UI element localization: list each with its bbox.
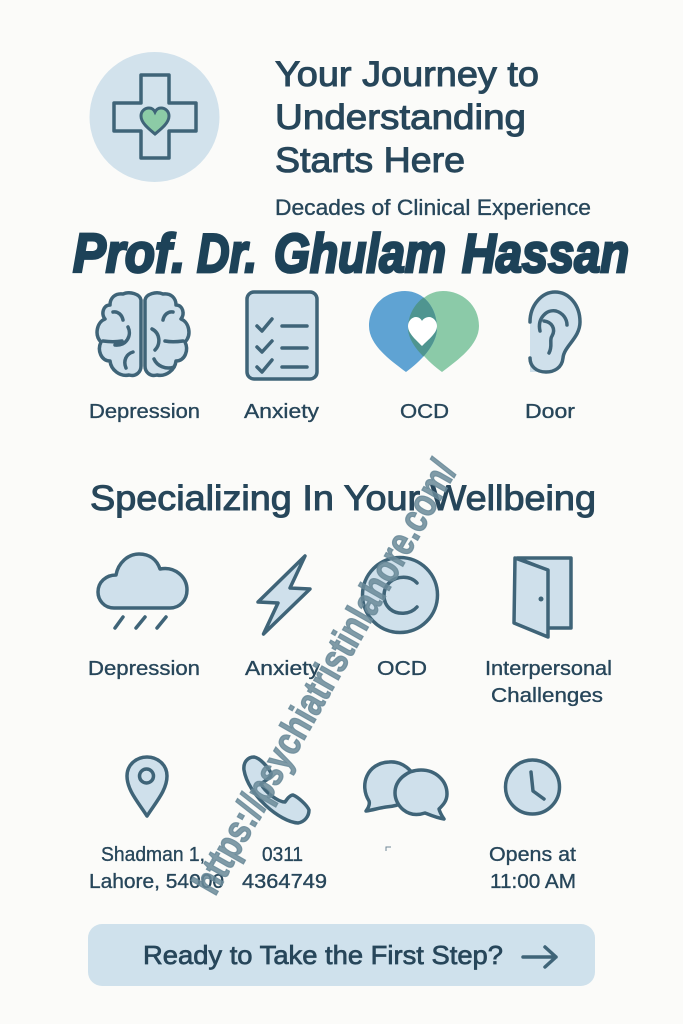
labels: contact row: 0311: [262, 844, 303, 866]
watermark url: https://psychiatristinlahore.com/: [185, 453, 465, 901]
title: [275, 55, 539, 180]
labels: first row: [89, 401, 575, 423]
labels: contact row: [89, 844, 576, 893]
doctor name: Ghulam: [274, 222, 446, 284]
labels: first row: OCD: [400, 401, 449, 423]
labels: contact row: 11:00 AM: [490, 871, 576, 893]
icon: medical cross with heart: [90, 52, 220, 182]
icon: lightning bolt: [258, 556, 310, 634]
labels: contact row: Lahore, 54000: [89, 871, 224, 893]
labels: second row: OCD: [377, 658, 427, 680]
labels: first row: Anxiety: [244, 401, 319, 423]
icon row: conditions: [97, 291, 580, 379]
labels: second row: Depression: [88, 658, 200, 680]
doctor name: Dr.: [197, 222, 257, 284]
icon: location pin: [127, 757, 167, 816]
icon: chat bubbles: [365, 762, 447, 819]
doctor name: [73, 222, 629, 284]
title: Your Journey to: [275, 55, 539, 94]
icon: phone: [244, 757, 309, 823]
title: Understanding: [275, 98, 526, 137]
call to action button: [88, 924, 595, 986]
labels: contact row: Opens at: [489, 844, 576, 866]
labels: contact row: 4364749: [242, 871, 327, 893]
icon: ear: [530, 292, 580, 372]
icon: arrow: [523, 947, 556, 967]
doctor name: Hassan: [462, 222, 629, 284]
icon row: specialties: [98, 554, 571, 637]
labels: second row: Interpersonal: [485, 658, 612, 680]
labels: second row: Challenges: [491, 685, 603, 707]
labels: second row: Anxiety: [245, 658, 320, 680]
icon: clock: [506, 760, 560, 814]
subtitle: Decades of Clinical Experience: [275, 195, 591, 220]
section heading: Specializing In Your Wellbeing: [90, 479, 596, 518]
icon: open door: [514, 558, 571, 637]
icon: circled C: [362, 558, 438, 632]
labels: first row: Door: [525, 401, 575, 423]
title: Starts Here: [275, 141, 465, 180]
icon: overlapping hearts: [369, 291, 479, 372]
icon: rain cloud: [98, 554, 187, 628]
doctor name: Prof.: [73, 222, 185, 284]
icon: brain: [97, 293, 189, 375]
button text: Ready to Take the First Step?: [143, 940, 503, 970]
labels: first row: Depression: [89, 401, 200, 423]
icon: checklist: [247, 292, 317, 379]
labels: second row: [88, 658, 612, 707]
icon row: contact: [127, 757, 560, 823]
labels: contact row: Shadman 1,: [101, 844, 205, 866]
